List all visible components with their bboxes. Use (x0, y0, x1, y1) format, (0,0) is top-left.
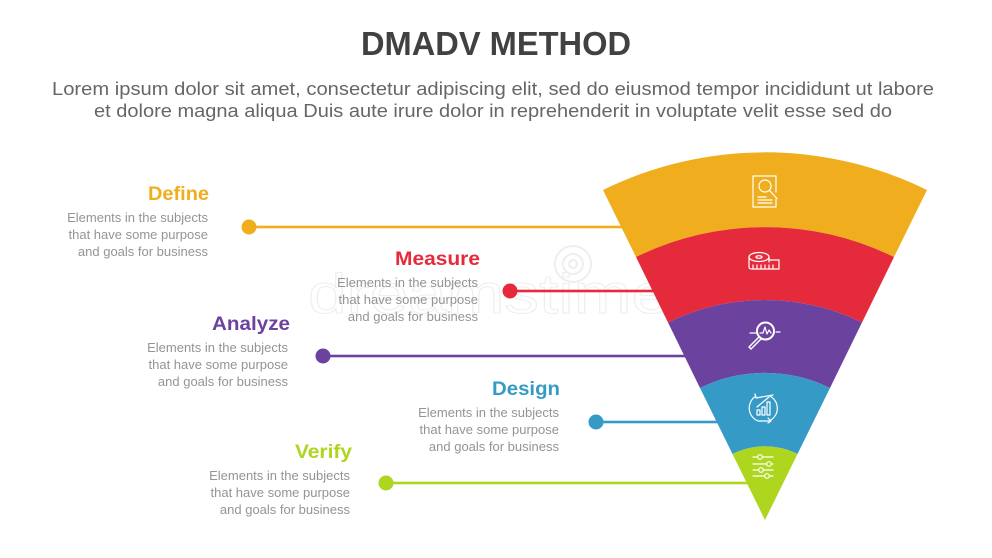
text block: design (418, 379, 560, 454)
text block: analyze (147, 314, 290, 389)
connector: measure (502, 284, 655, 298)
text block: verify: and goals for business (220, 502, 350, 517)
funnel chart (603, 152, 927, 520)
text block: define: that have some purpose (69, 227, 208, 242)
text block: verify: that have some purpose (211, 485, 350, 500)
text block: verify (209, 442, 352, 517)
icon: sliders (753, 455, 773, 478)
text block: design: and goals for business (429, 439, 559, 454)
text block: analyze: Analyze (212, 314, 290, 335)
text block: measure: and goals for business (348, 309, 478, 324)
connector: define (242, 220, 625, 234)
text block: verify: Elements in the subjects (209, 468, 350, 483)
segment: design (700, 373, 830, 454)
segment: measure (636, 227, 894, 322)
subtitle text (52, 78, 934, 121)
segment: define (603, 152, 927, 257)
text block: analyze: Elements in the subjects (147, 340, 288, 355)
watermark (308, 246, 682, 325)
watermark: dreamstime (308, 262, 670, 325)
connector: verify (378, 476, 752, 490)
icon: document search (753, 176, 777, 207)
segment: analyze (668, 300, 862, 388)
text block: define (67, 184, 209, 259)
icon: magnifier chart (749, 322, 780, 349)
text block: design: Design (492, 379, 560, 400)
text block: measure: Measure (395, 249, 480, 270)
text block: measure (337, 249, 480, 324)
icon: measuring tape (749, 252, 779, 269)
icon: growth cycle (749, 394, 777, 423)
text block: define: Define (148, 184, 209, 205)
subtitle text: et dolore magna aliqua Duis aute irure dolor in reprehenderit in voluptate velit esse sed do (94, 100, 892, 121)
text block: design: that have some purpose (420, 422, 559, 437)
text block: measure: Elements in the subjects (337, 275, 478, 290)
text block: verify: Verify (295, 442, 352, 463)
text block: analyze: that have some purpose (149, 357, 288, 372)
subtitle text: Lorem ipsum dolor sit amet, consectetur adipiscing elit, sed do eiusmod tempor incididunt ut labore (52, 78, 934, 99)
text block: analyze: and goals for business (158, 374, 288, 389)
connector: design (588, 414, 720, 430)
title: DMADV METHOD (361, 25, 631, 62)
text block: define: and goals for business (78, 244, 208, 259)
connector: analyze (316, 348, 688, 364)
segment: verify (732, 446, 798, 520)
text block: define: Elements in the subjects (67, 210, 208, 225)
text block: measure: that have some purpose (339, 292, 478, 307)
text block: design: Elements in the subjects (418, 405, 559, 420)
